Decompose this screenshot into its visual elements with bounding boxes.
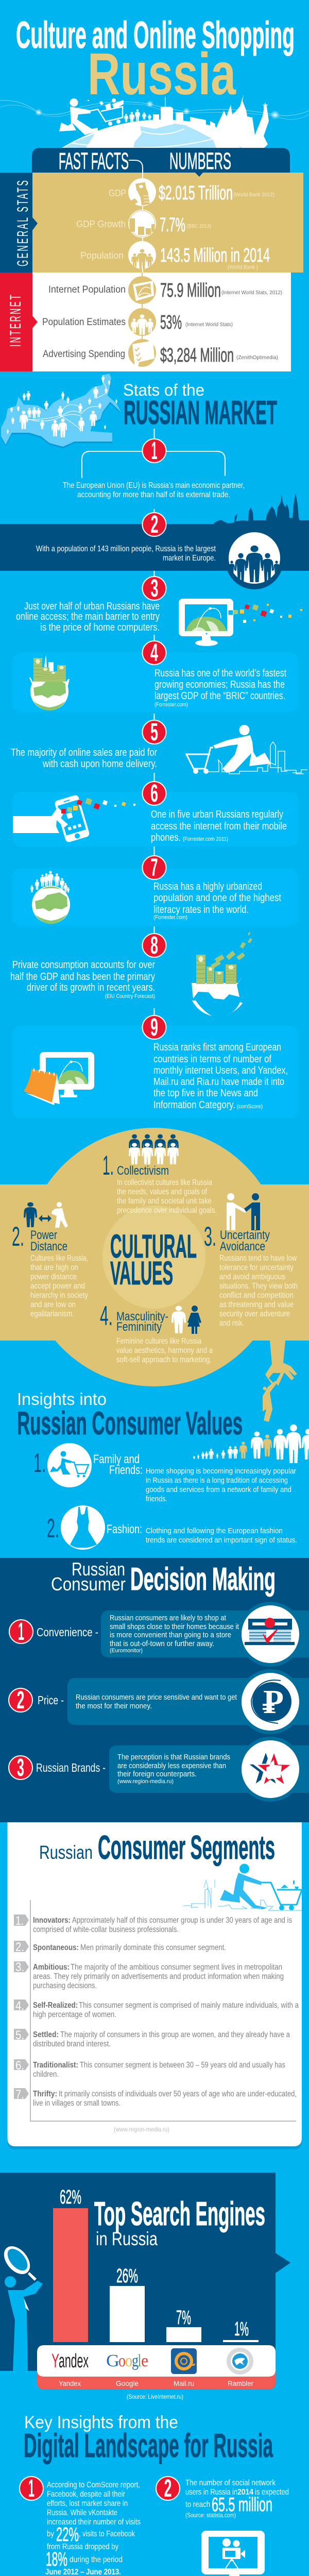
insight 1: family and friends: in Russia as there is a long tradition of accessing	[146, 1476, 288, 1485]
row 2: price: Russian consumers are price sensitive and want to get	[76, 1693, 237, 1702]
fact 8: private consumption: 8	[150, 932, 158, 959]
panel: internet stats: 53%	[160, 312, 182, 333]
general stats labels and numbers: $2.015 Trillion	[159, 182, 233, 204]
panel: internet stats: Advertising Spending	[43, 349, 125, 360]
bar chart: search engine share: 7%	[176, 2307, 191, 2329]
fact 2: largest market band: With a population of 143 million people, Russia is the largest	[36, 545, 216, 553]
fact 1: EU economic partner: 1	[151, 437, 158, 465]
insight 2: social network users: The number of social network	[185, 2479, 276, 2487]
fact 3: online access	[16, 575, 166, 633]
insight 1: family and friends: Family and	[93, 1452, 140, 1466]
timeline spine line segments	[153, 429, 154, 1015]
logo: Yandex	[52, 2350, 89, 2372]
heading: Russian consumer segments	[39, 1828, 275, 1866]
graphic: row of people growing in size	[193, 1425, 309, 1463]
heading: Russian consumer decision making: Consumer	[51, 1573, 126, 1595]
panel: fact 9 internet users: countries in terms of number of	[153, 1054, 271, 1065]
insight 1: Facebook lost market share: 18%	[46, 2549, 67, 2570]
row 1: convenience: is more convenient than going to a store	[110, 1631, 231, 1639]
value 1: collectivism: In collectivist cultures like Russia	[117, 1178, 212, 1187]
insight 1: family and friends: friends.	[146, 1495, 167, 1503]
panel: internet stats: (Internet World Stats)	[185, 322, 233, 328]
panel: fact 9 internet users: 9	[150, 1014, 158, 1041]
panel: general stats: GENERAL STATS	[14, 179, 31, 266]
panel: fact 4 fastest growing economy: 4	[150, 639, 158, 667]
insight 2: fashion: Fashion:	[107, 1522, 142, 1536]
fact 3: online access: Just over half of urban Russians have	[24, 601, 160, 612]
insight 2: fashion: Clothing and following the European fashion	[146, 1527, 283, 1535]
bar chart: search engine share	[53, 2187, 259, 2342]
heading: Russian consumer segments: Russian	[39, 1842, 93, 1863]
segment 2: spontaneous	[14, 1940, 226, 1954]
insight 1: family and friends: goods and services from a network of family and	[146, 1485, 291, 1494]
general stats labels and numbers: (World Bank 2012)	[233, 192, 274, 198]
insight 1: Facebook lost market share: Russia. While vKontakte	[47, 2509, 117, 2517]
row 3: Russian brands: Russian Brands -	[36, 1761, 106, 1774]
segment 1: innovators: 1.	[15, 1914, 24, 1928]
panel: cultural values: CULTURAL	[110, 1228, 197, 1265]
fact 3: online access: is the price of home computers.	[40, 622, 160, 633]
bar chart: search engine share: 62%	[60, 2187, 81, 2208]
logos strip: Yandex	[59, 2379, 81, 2387]
insight 1: Facebook lost market share: 1	[28, 2475, 35, 2502]
segment 3: ambitious: purchasing decisions.	[33, 1981, 97, 1990]
panel: fact 6 mobile internet	[13, 780, 298, 846]
insight 1: Facebook lost market share: during the period	[70, 2555, 123, 2564]
heading: top search engines: in Russia	[96, 2228, 158, 2249]
value 2: power distance: 2.	[12, 1222, 24, 1252]
panel: internet stats: 75.9 Million	[160, 280, 221, 301]
value 2: power distance: accept power and	[30, 1282, 85, 1291]
value 3: uncertainty avoidance: Avoidance	[220, 1240, 265, 1253]
value 1: collectivism	[102, 1134, 217, 1215]
insight 2: social network users: 65.5 million	[212, 2494, 272, 2516]
value 3: uncertainty avoidance: Uncertainty	[220, 1228, 270, 1242]
panel: internet stats: (Internet World Stats, 2012)	[221, 290, 282, 296]
panel: internet stats: (ZenithOptimedia)	[236, 355, 278, 361]
value 2: power distance	[12, 1202, 88, 1318]
panel: top search engines	[0, 2173, 290, 2389]
segment 5: settled	[14, 2028, 290, 2048]
fact 5: cash on delivery: with cash upon home delivery.	[42, 758, 157, 770]
row 2: price: Price -	[38, 1693, 64, 1707]
panel: internet stats: INTERNET	[7, 293, 24, 347]
icon: gold hand holding a figure	[263, 1341, 297, 1422]
value 4: masculinity femininity	[100, 1301, 213, 1364]
panel: fact 7 urbanized population: literacy rates in the world.	[153, 904, 249, 916]
fact 5: cash on delivery: 5	[150, 719, 158, 746]
logos strip: Google	[116, 2379, 139, 2387]
insight 2: fashion: 2.	[47, 1514, 59, 1544]
segment 5: settled: distributed brand interest.	[33, 2040, 111, 2048]
panel: cultural values	[0, 1128, 309, 1386]
value 4: masculinity femininity: soft-sell approach to marketing.	[116, 1355, 212, 1364]
value 4: masculinity femininity: Feminine cultures like Russia	[116, 1337, 201, 1346]
value 1: collectivism: precedence over individual goals.	[117, 1206, 217, 1215]
value 3: uncertainty avoidance: and avoid ambiguous	[219, 1273, 285, 1281]
panel: fact 6 mobile internet: 6	[150, 780, 158, 807]
header illustration: shopper running on globe with city skyline	[0, 94, 309, 148]
value 2: power distance: Cultures like Russia,	[30, 1254, 88, 1263]
row 3: Russian brands	[9, 1737, 309, 1802]
fact 3: online access: 3	[150, 575, 159, 602]
icon: star with thumb up	[250, 1751, 290, 1785]
fact 5: cash on delivery	[11, 719, 166, 770]
icon: monitor with globe and flying squares	[179, 599, 302, 646]
fact 2: largest market band: 2	[150, 511, 159, 538]
title	[16, 14, 295, 107]
fact 8: private consumption: half the GDP and has been the primary	[10, 971, 155, 982]
title: Russia	[88, 41, 236, 107]
value 3: uncertainty avoidance: as threatening and value	[219, 1300, 294, 1309]
logo: Google	[106, 2351, 148, 2370]
insight 1: Facebook lost market share	[20, 2475, 141, 2576]
row 1: convenience: Russian consumers are likely to shop at	[110, 1614, 227, 1622]
fact 1: EU economic partner: The European Union (EU) is Russia’s main economic partner,	[63, 481, 245, 490]
row 2: price: the most for their money.	[76, 1702, 152, 1710]
segment 3: ambitious	[14, 1960, 284, 1990]
panel: consumer segments	[7, 1822, 302, 2149]
icon: store with check mark	[245, 1618, 295, 1645]
general stats labels and numbers: (World Bank )	[228, 264, 258, 270]
panel: fast facts header: FAST FACTS	[59, 148, 129, 174]
row 1: convenience: Convenience -	[37, 1625, 98, 1639]
row 3: Russian brands: 3	[17, 1754, 24, 1782]
insight 2: fashion	[47, 1505, 297, 1550]
logo: Yandex: andex	[59, 2350, 89, 2372]
bar chart: search engine share: 1%	[234, 2318, 249, 2340]
value 3: uncertainty avoidance: tolerance for uncertainty	[219, 1263, 294, 1272]
heading: key insights from the digital landscape: Key Insights from the	[24, 2413, 178, 2432]
icon: GDP growth stacks	[128, 210, 156, 238]
fact 2: largest market band	[0, 511, 309, 589]
segment 1: innovators	[14, 1914, 292, 1934]
insight 1: Facebook lost market share: Facebook, despite all their	[47, 2490, 126, 2499]
row 3: Russian brands: their foreign counterparts.	[117, 1770, 197, 1778]
icon: population people	[128, 241, 156, 269]
panel: fact 7 urbanized population: (Forrester.com)	[153, 914, 187, 921]
icon: rouble sign: P	[263, 1683, 284, 1721]
fact 8: private consumption: Private consumption accounts for over	[12, 959, 155, 971]
segment 6: traditionalist: Traditionalist:	[33, 2061, 78, 2070]
bar chart: search engine share: 26%	[116, 2265, 138, 2287]
fact 8: private consumption: (EIU Country Forecast)	[105, 993, 155, 999]
icon: monitor with video camera	[201, 2531, 265, 2576]
logo: Rambler	[229, 2350, 251, 2372]
fact 8: private consumption: driver of its growth in recent years.	[27, 982, 155, 993]
value 1: collectivism: 1.	[102, 1150, 114, 1181]
panel: general stats	[0, 160, 303, 273]
segment 6: traditionalist	[14, 2059, 285, 2079]
value 3: uncertainty avoidance: and risk.	[219, 1319, 244, 1328]
segment 2: spontaneous: Spontaneous:	[33, 1943, 79, 1952]
panel: fact 9 internet users: (comScore)	[237, 1104, 263, 1110]
segment 4: self-realized: high percentage of women.	[33, 2010, 116, 2019]
logo: Google: o	[125, 2351, 132, 2370]
insight 2: social network users	[156, 2475, 289, 2519]
value 2: power distance: hierarchy in society	[30, 1291, 88, 1300]
logo: Google: l	[138, 2351, 141, 2370]
panel: fact 7 urbanized population: population and one of the highest	[153, 892, 281, 904]
value 2: power distance: power distance	[30, 1273, 77, 1281]
section background: decision making	[0, 1558, 309, 1822]
insight 2: social network users: users in Russia in	[185, 2488, 237, 2497]
silhouette: Moscow skyline	[213, 493, 309, 526]
value 4: masculinity femininity: Femininity	[116, 1320, 162, 1334]
row 3: Russian brands: (www.region-media.ru)	[117, 1778, 174, 1785]
value 2: power distance: that are high on	[30, 1263, 78, 1272]
fact 2: largest market band: market in Europe.	[163, 554, 216, 563]
value 3: uncertainty avoidance: security over adventure	[219, 1310, 290, 1318]
panel: fact 7 urbanized population	[13, 854, 298, 926]
general stats labels and numbers: (BBC 2013)	[187, 224, 211, 229]
general stats labels and numbers	[76, 182, 274, 270]
panel: fact 4 fastest growing economy	[13, 639, 298, 712]
panel: fact 6 mobile internet: phones.	[151, 832, 181, 843]
segment 6: traditionalist: 6.	[15, 2059, 24, 2073]
source note: LiveInternet: (Source: LiveInternet.ru)	[127, 2393, 183, 2400]
segment 7: thrifty: live in villages or small towns.	[33, 2099, 121, 2108]
panel: internet stats	[0, 273, 291, 371]
icon: money stacks on globe	[192, 932, 252, 1016]
insight 2: social network users: 2	[164, 2475, 172, 2502]
value 1: collectivism: the family and societal unit take	[117, 1197, 212, 1206]
general stats labels and numbers: GDP Growth	[76, 219, 126, 229]
segment 7: thrifty: Thrifty:	[33, 2090, 57, 2098]
row 2: price: 2	[16, 1687, 25, 1714]
general stats labels and numbers: Population	[80, 250, 124, 261]
insight 2: social network users: to reach	[185, 2500, 210, 2509]
value 4: masculinity femininity: Masculinity-	[116, 1310, 168, 1324]
icon: rouble sign	[251, 1680, 291, 1723]
value 3: uncertainty avoidance: conflict and competition	[219, 1291, 294, 1300]
logos strip: Rambler	[228, 2379, 253, 2387]
insight 2: social network users: 2014	[237, 2488, 253, 2497]
value 4: masculinity femininity: value aesthetics, harmony and a	[116, 1346, 213, 1355]
insight 1: Facebook lost market share: According to ComScore report,	[47, 2481, 140, 2489]
panel: fact 4 fastest growing economy: (Forrester.com)	[154, 702, 188, 708]
insight 1: Facebook lost market share: increased their number of visits	[47, 2518, 141, 2527]
general stats labels and numbers: GDP	[109, 188, 126, 198]
fact 8: private consumption	[10, 932, 166, 999]
logos strip	[37, 2345, 276, 2389]
panel: fast facts header	[32, 148, 290, 174]
insight 1: Facebook lost market share: 22%	[56, 2524, 79, 2546]
segment 4: self-realized	[14, 1999, 299, 2019]
heading: Russian consumer decision making: Russian	[72, 1558, 125, 1580]
heading: top search engines	[94, 2195, 265, 2249]
panel: fact 9 internet users: the top five in the News and	[153, 1088, 258, 1099]
fact 5: cash on delivery: The majority of online sales are paid for	[11, 747, 157, 758]
value 2: power distance: egalitarianism.	[30, 1310, 74, 1318]
heading: stats of the Russian market: Stats of the	[123, 381, 204, 399]
logo: Google: e	[141, 2351, 148, 2370]
insight 1: Facebook lost market share: from Russia dropped by	[47, 2543, 118, 2551]
icon: GDP hand holding cash	[128, 178, 156, 206]
illustration: man with magnifying glass	[0, 2241, 43, 2371]
value 3: uncertainty avoidance	[204, 1193, 298, 1328]
insight 1: family and friends: Friends:	[109, 1463, 143, 1477]
segment 5: settled: Settled:	[33, 2030, 59, 2039]
row 2: price	[9, 1669, 309, 1734]
value 4: masculinity femininity: 4.	[100, 1301, 113, 1331]
segment 1: innovators: Innovators:	[33, 1916, 71, 1925]
insight 1: Facebook lost market share: , visits to Facebook	[79, 2530, 135, 2538]
illustration: blue runner with cart	[183, 1864, 302, 1910]
logo: Mail.ru	[171, 2348, 197, 2374]
segment 3: ambitious: 3.	[15, 1960, 24, 1974]
segment 5: settled: 5.	[15, 2028, 24, 2042]
source note: (www.region-media.ru)	[114, 2126, 169, 2133]
icon: runner with cart and skyline	[186, 725, 307, 774]
map of Russia with people	[1, 374, 121, 448]
segment 7: thrifty	[14, 2088, 297, 2108]
panel: internet stats: Internet Population	[48, 284, 126, 295]
row 1: convenience: (Euromonitor)	[110, 1648, 143, 1654]
segment 7: thrifty: 7.	[15, 2088, 24, 2102]
segment 1: innovators: comprised of white-collar business professionals.	[33, 1925, 179, 1934]
row 1: convenience	[9, 1602, 309, 1667]
logo: Google: o	[118, 2351, 126, 2370]
heading: insights into Russian consumer values	[17, 1389, 243, 1442]
insight 1: Facebook lost market share: by	[47, 2530, 54, 2538]
panel: fact 7 urbanized population: 7	[150, 854, 158, 882]
insight 1: family and friends	[33, 1443, 296, 1503]
value 1: collectivism: the needs, values and goals of	[117, 1188, 207, 1196]
panel: internet stats: $3,284 Million	[160, 345, 234, 366]
segment 2: spontaneous: Men primarily dominate this consumer segment.	[80, 1943, 226, 1952]
value 2: power distance: Power	[30, 1228, 57, 1242]
row 3: Russian brands: The perception is that Russian brands	[117, 1753, 230, 1761]
heading: stats of the Russian market	[123, 381, 277, 431]
row 1: convenience: 1	[18, 1618, 24, 1646]
heading: cultural values	[110, 1228, 197, 1292]
panel: fact 6 mobile internet: (Forrester.com 2011)	[183, 836, 228, 842]
heading: insights into Russian consumer values: Insights into	[17, 1389, 107, 1409]
segment 2: spontaneous: 2.	[15, 1940, 24, 1954]
value 2: power distance: and are low on	[30, 1300, 76, 1309]
segment 3: ambitious: Ambitious:	[33, 1963, 70, 1972]
logo: Google: G	[106, 2351, 119, 2370]
fact 1: EU economic partner	[63, 437, 245, 499]
panel: internet stats: Population Estimates	[42, 317, 126, 328]
heading: cultural values: VALUES	[110, 1255, 173, 1292]
heading: key insights from the digital landscape	[24, 2413, 273, 2464]
value 1: collectivism: Collectivism	[117, 1164, 169, 1178]
insight 2: social network users: .	[272, 2503, 274, 2509]
logo: Google: g	[132, 2351, 139, 2370]
value 2: power distance: Distance	[30, 1240, 67, 1253]
fact 1: EU economic partner: accounting for more than half of its external trade.	[77, 490, 230, 499]
general stats labels and numbers: 7.7%	[160, 214, 185, 236]
insight 1: family and friends: 1.	[33, 1448, 46, 1478]
segment 4: self-realized: 4.	[15, 1999, 24, 2013]
heading: Russian consumer decision making	[51, 1558, 276, 1597]
segment 3: ambitious: The majority of the ambitious consumer segment lives in metropolitan	[71, 1963, 282, 1972]
fact 3: online access: online access; the main barrier to entry	[16, 611, 160, 622]
logos strip: Mail.ru	[174, 2379, 194, 2387]
panel: fact 9 internet users: Information Category.	[153, 1099, 235, 1111]
row 1: convenience: small shops close to their homes because it	[110, 1622, 239, 1631]
panel: fact 7 urbanized population: Russia has a highly urbanized	[153, 881, 262, 892]
insight 2: social network users: (Source: statista.com)	[185, 2512, 236, 2519]
row 1: convenience: that is out-of-town or further away.	[110, 1639, 214, 1648]
value 3: uncertainty avoidance: 3.	[204, 1222, 216, 1252]
insight 2: social network users: is expected	[255, 2488, 289, 2497]
segment 6: traditionalist: children.	[33, 2070, 59, 2079]
insight 1: Facebook lost market share: efforts, lost market share in	[47, 2499, 128, 2508]
panel: fast facts header: NUMBERS	[169, 148, 231, 174]
panel: fact 9 internet users	[13, 1014, 298, 1118]
segment 4: self-realized: Self-Realized:	[33, 2001, 78, 2010]
logo: Yandex: Y	[52, 2350, 59, 2372]
row 3: Russian brands: are considerably less expensive than	[117, 1761, 226, 1770]
